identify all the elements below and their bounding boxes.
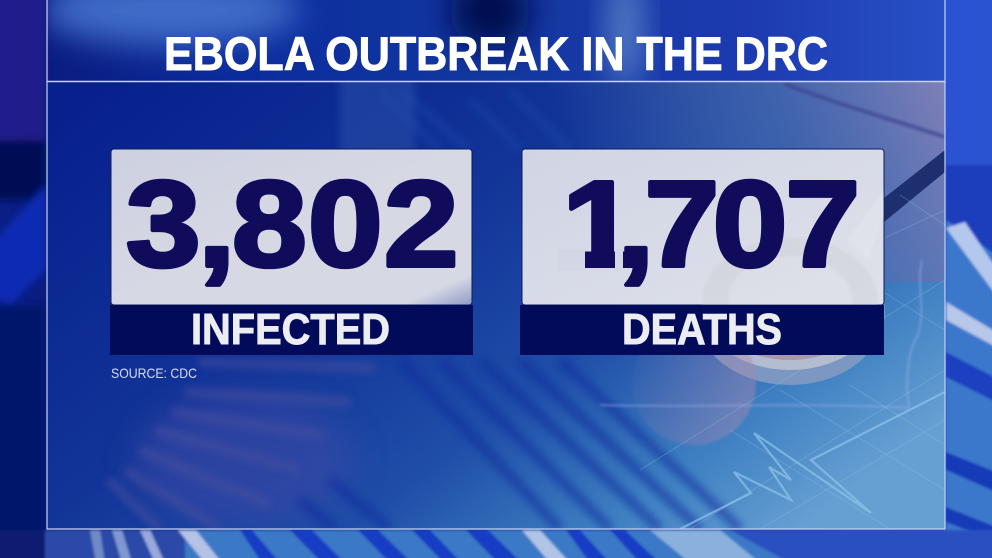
icon: heart outline [600, 260, 922, 408]
number background [522, 149, 884, 305]
number background [111, 149, 472, 305]
number: 3,802: 3,802 [126, 157, 459, 293]
left side column [0, 0, 46, 558]
label band [110, 305, 473, 355]
label band [520, 305, 884, 355]
icon: heartbeat line [680, 392, 945, 529]
bottom stripes strip [0, 530, 992, 558]
chart grid lines [640, 195, 945, 529]
label: deaths: DEATHS [622, 305, 782, 354]
number: 1,707: 1,707 [562, 157, 860, 293]
title: EBOLA OUTBREAK IN THE DRC [164, 27, 828, 80]
icon: translucent glow circle [634, 355, 757, 446]
stethoscope seen through card [701, 190, 884, 305]
panel: deaths card [520, 149, 884, 362]
right side column [946, 0, 992, 558]
foot cover for numeral one [558, 249, 623, 271]
panel [47, 75, 945, 529]
icon: stethoscope tube [695, 84, 945, 385]
label: infected: INFECTED [191, 305, 390, 354]
source note: SOURCE: CDC [111, 365, 197, 381]
panel: infected card [110, 149, 473, 355]
